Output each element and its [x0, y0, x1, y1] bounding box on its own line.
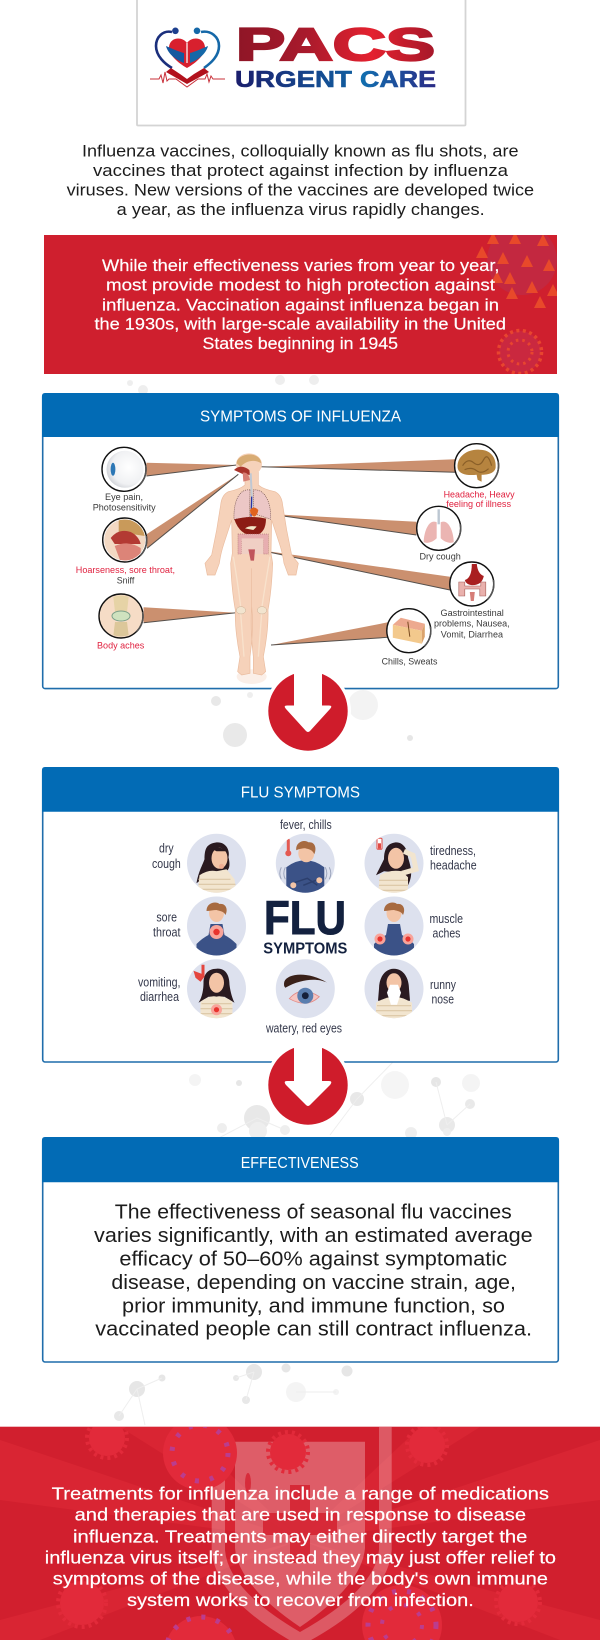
flu symptom labels: headache [430, 858, 477, 873]
panel header [42, 1137, 559, 1182]
flu symptom labels: muscle [430, 911, 463, 926]
icon: woman dry cough [187, 834, 246, 893]
arrow: down to effectiveness [265, 1042, 351, 1128]
red callout panel: While their effectiveness varies from year to year, [102, 256, 500, 275]
symptom labels: Gastrointestinal [440, 608, 504, 619]
icon: woman tiredness headache [364, 834, 424, 893]
icon: woman runny nose [364, 959, 424, 1019]
icon: eye [102, 447, 146, 491]
panel: flu symptoms [42, 767, 559, 1062]
symptom labels: Sniff [117, 576, 135, 587]
virus decoration [476, 225, 559, 374]
symptom labels: Chills, Sweats [382, 657, 438, 668]
anatomy body figure [205, 453, 298, 684]
icon: watery red eye [276, 959, 335, 1018]
flu symptom labels: fever, chills [280, 817, 332, 832]
red callout panel: States beginning in 1945 [202, 334, 398, 353]
flu symptom labels: watery, red eyes [265, 1021, 342, 1036]
flu symptom labels: aches [432, 926, 460, 941]
symptom labels: Headache, Heavy [444, 490, 515, 501]
effectiveness text: vaccinated people can still contract influenza. [95, 1319, 532, 1341]
red callout panel: most provide modest to high protection against [106, 276, 495, 295]
icon: skin layers [387, 609, 431, 653]
logo wordmark [235, 19, 436, 92]
panel header: SYMPTOMS OF INFLUENZA [200, 409, 401, 426]
intro text: vaccines that protect against infection by influenza [93, 161, 509, 180]
virus decorations [60, 1420, 538, 1625]
icon: woman vomiting diarrhea [187, 959, 246, 1019]
symptom labels: Eye pain, [105, 492, 143, 503]
background molecule pattern [114, 375, 480, 1425]
treatments text: and therapies that are used in response to disease [75, 1505, 526, 1525]
symptom labels: Body aches [97, 640, 144, 651]
icon: brain [455, 444, 499, 488]
effectiveness text: efficacy of 50–60% against symptomatic [119, 1248, 507, 1270]
icon: man muscle aches [364, 896, 424, 956]
red callout panel: the 1930s, with large-scale availability in the United [94, 315, 506, 334]
logo icon: heart and hands [150, 28, 225, 87]
big viruses [163, 1427, 237, 1490]
logo box [137, 0, 466, 126]
panel header: EFFECTIVENESS [241, 1155, 359, 1172]
symptom labels: Vomit, Diarrhea [441, 630, 504, 641]
callout wedges [144, 459, 455, 645]
panel header [42, 393, 559, 437]
flu symptom labels [138, 817, 477, 1036]
red callout panel: influenza. Vaccination against influenza began in [102, 295, 499, 314]
effectiveness text: prior immunity, and immune function, so [122, 1295, 505, 1317]
flu symptom labels: nose [432, 992, 454, 1007]
panel header: FLU SYMPTOMS [241, 784, 360, 801]
panel header [42, 767, 559, 812]
intro text: viruses. New versions of the vaccines are developed twice [67, 181, 534, 200]
flu symptom labels: sore [156, 910, 177, 925]
panel: effectiveness [42, 1137, 559, 1362]
icon: lungs [417, 506, 461, 550]
flu symptoms centre title: FLU [264, 891, 346, 944]
icon: stomach and intestine [450, 562, 494, 606]
icon: man sore throat [187, 896, 246, 956]
intro text [67, 142, 534, 219]
icon: throat [103, 518, 147, 562]
effectiveness text: The effectiveness of seasonal flu vaccines [115, 1201, 512, 1223]
decorative rays [0, 1427, 600, 1640]
symptom labels [76, 490, 515, 668]
effectiveness text: disease, depending on vaccine strain, age, [111, 1272, 516, 1294]
flu symptom labels: diarrhea [140, 989, 180, 1004]
flu symptom labels: tiredness, [430, 843, 476, 858]
treatments text: Treatments for influenza include a range of medications [52, 1483, 549, 1503]
symptom labels: Dry cough [420, 552, 461, 563]
intro text: a year, as the influenza virus rapidly changes. [117, 200, 485, 219]
effectiveness text [94, 1201, 533, 1341]
treatments text: influenza. Treatments may either directly target the [73, 1526, 528, 1546]
symptom labels: Hoarseness, sore throat, [76, 565, 175, 576]
logo wordmark: URGENT [235, 66, 353, 92]
shield [212, 1427, 392, 1640]
flu symptom labels: runny [430, 977, 456, 992]
icon: man fever chills [276, 834, 335, 893]
symptom labels: problems, Nausea, [434, 619, 510, 630]
intro text: Influenza vaccines, colloquially known as flu shots, are [82, 142, 518, 160]
symptom labels: Photosensitivity [93, 503, 156, 514]
logo wordmark: CARE [360, 66, 436, 92]
treatments text: system works to recover from infection. [127, 1590, 474, 1610]
arrow: down to flu symptoms [265, 668, 351, 754]
treatments text: symptoms of the disease, while the body's own immune [53, 1569, 548, 1589]
flu symptom labels: cough [152, 856, 181, 871]
treatments text [45, 1483, 556, 1610]
symptom labels: feeling of illness [446, 499, 511, 510]
flu symptoms centre title: SYMPTOMS [263, 940, 348, 957]
icon: knee [99, 594, 143, 638]
panel: treatments [0, 1416, 600, 1640]
treatments text: influenza virus itself; or instead they may just offer relief to [45, 1547, 556, 1567]
panel: symptoms of influenza [42, 393, 559, 689]
flu symptom labels: vomiting, [138, 974, 180, 989]
flu symptom labels: throat [153, 925, 181, 940]
flu symptom labels: dry [159, 841, 174, 856]
logo wordmark: PACS [236, 19, 435, 70]
red callout panel [44, 225, 559, 374]
effectiveness text: varies significantly, with an estimated average [94, 1225, 533, 1247]
